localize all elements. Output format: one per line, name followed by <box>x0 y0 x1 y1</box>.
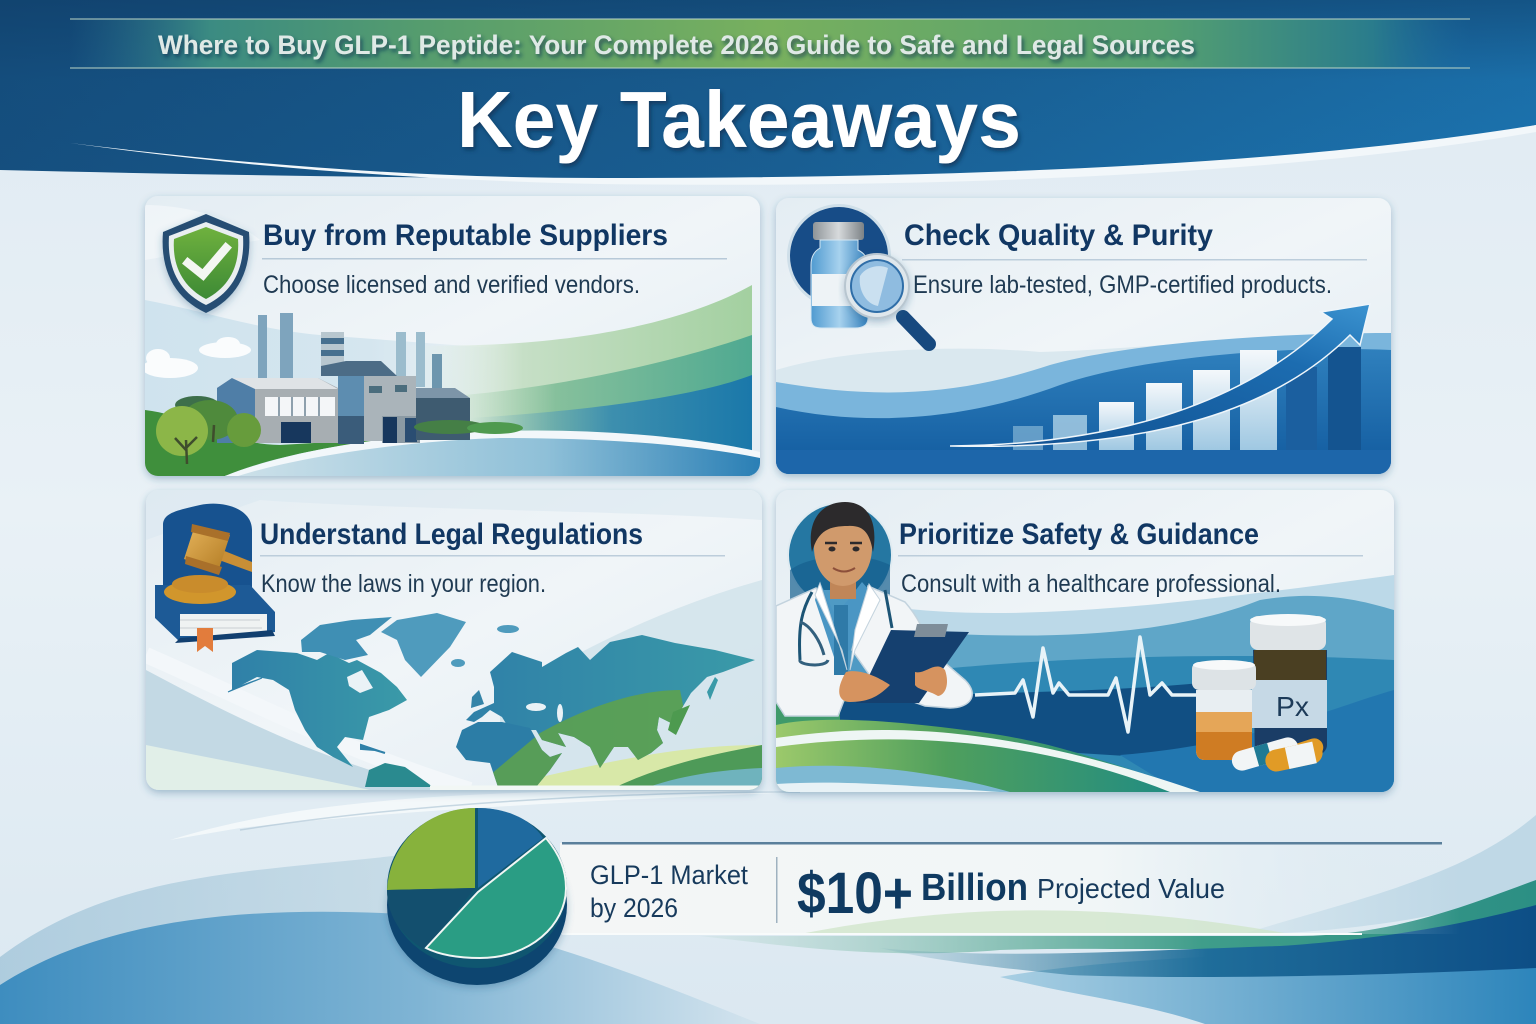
heart rate line <box>975 637 1196 732</box>
market label: GLP-1 Market <box>590 860 748 890</box>
icon: medicine bottles: Px <box>1276 691 1309 722</box>
text: buy from reputable suppliers: Choose licensed and verified vendors. <box>263 271 640 299</box>
market value: Billion <box>921 867 1028 909</box>
market label: by 2026 <box>590 893 678 923</box>
top banner: Where to Buy GLP-1 Peptide: Your Complete 2026 Guide to Safe and Legal Sources <box>158 30 1195 60</box>
bottom background waves <box>0 790 1536 1024</box>
arrow <box>950 304 1370 446</box>
panel: understand legal regulations <box>146 490 762 790</box>
icon: medicine bottles <box>1192 614 1327 774</box>
clouds <box>142 337 251 378</box>
market value <box>797 861 1225 926</box>
bar chart <box>1013 347 1361 450</box>
pie chart <box>387 808 567 985</box>
heading: check quality and purity: Check Quality & Purity <box>904 219 1213 252</box>
green swoosh <box>430 745 762 790</box>
text: prioritize safety and guidance: Consult with a healthcare professional. <box>901 570 1281 598</box>
heading: prioritize safety and guidance: Prioritize Safety & Guidance <box>899 518 1259 551</box>
panel: prioritize safety and guidance <box>776 490 1394 792</box>
icon: shield check <box>163 214 249 313</box>
factory <box>217 313 470 444</box>
trees <box>156 396 523 464</box>
card waves <box>776 575 1394 792</box>
icon: gavel and law book <box>155 504 275 652</box>
callout: market value band <box>560 842 1460 935</box>
heading: buy from reputable suppliers: Buy from Reputable Suppliers <box>263 219 668 252</box>
text: check quality and purity: Ensure lab-tested, GMP-certified products. <box>913 271 1332 299</box>
text: understand legal regulations: Know the laws in your region. <box>261 570 546 598</box>
icon: doctor <box>776 502 972 716</box>
market value: $10+ <box>797 861 913 926</box>
market value: Projected Value <box>1037 873 1225 904</box>
clipboard <box>839 624 969 703</box>
chart waves <box>776 333 1391 474</box>
heading: understand legal regulations: Understand Legal Regulations <box>260 518 643 551</box>
top banner <box>70 18 1470 69</box>
panel: buy from reputable suppliers <box>142 196 760 478</box>
landscape waves <box>145 285 760 478</box>
world map <box>228 613 755 790</box>
market label <box>590 860 748 923</box>
card waves <box>146 490 762 790</box>
header background wave <box>0 0 1536 185</box>
title: Key Takeaways <box>457 75 1021 164</box>
icon: vial and magnifier <box>787 204 929 344</box>
panel: check quality and purity <box>776 198 1391 474</box>
